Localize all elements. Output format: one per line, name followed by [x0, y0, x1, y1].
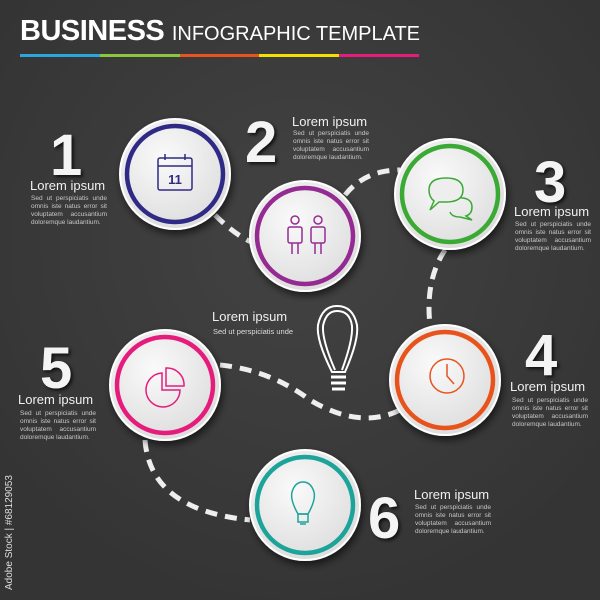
- step 6: Sed ut perspiciatis unde omnis iste natus error sit voluptatem accusantium doloremque laudantium.: [415, 504, 491, 535]
- icon: calendar: 11: [168, 172, 182, 187]
- circle 5: [110, 330, 220, 440]
- step 3: Lorem ipsum: [514, 204, 589, 219]
- step 3: [514, 150, 591, 252]
- icon: clock: [430, 359, 464, 393]
- step 3: Sed ut perspiciatis unde omnis iste natus error sit voluptatem accusantium doloremque laudantium.: [515, 221, 591, 252]
- icon: small bulb: [292, 482, 314, 524]
- step 4: Lorem ipsum: [510, 379, 585, 394]
- icon: pie chart: [146, 368, 184, 407]
- step 1: Sed ut perspiciatis unde omnis iste natus error sit voluptatem accusantium doloremque laudantium.: [31, 195, 107, 226]
- step 5: Lorem ipsum: [18, 392, 93, 407]
- step 6: Lorem ipsum: [414, 487, 489, 502]
- step 5: [18, 336, 96, 441]
- circle 1: [120, 119, 230, 229]
- step 1: 1: [50, 123, 82, 188]
- center text: [212, 309, 293, 336]
- circle 4: [390, 325, 500, 435]
- center text: Sed ut perspiciatis unde: [213, 327, 293, 336]
- step 4: 4: [525, 323, 557, 388]
- step 2: Sed ut perspiciatis unde omnis iste natus error sit voluptatem accusantium doloremque laudantium.: [293, 130, 369, 161]
- step 4: [510, 323, 588, 428]
- circle 2: [250, 181, 360, 291]
- step 3: 3: [534, 150, 566, 215]
- step 2: [245, 110, 369, 175]
- step 5: Sed ut perspiciatis unde omnis iste natus error sit voluptatem accusantium doloremque laudantium.: [20, 410, 96, 441]
- step 2: 2: [245, 110, 277, 175]
- icon: calendar: [158, 154, 192, 190]
- step 4: Sed ut perspiciatis unde omnis iste natus error sit voluptatem accusantium doloremque laudantium.: [512, 397, 588, 428]
- step 6: [368, 486, 491, 551]
- center text: Lorem ipsum: [212, 309, 287, 324]
- step 6: 6: [368, 486, 400, 551]
- icon: people: [288, 216, 325, 254]
- step 1: [30, 123, 107, 226]
- step 2: Lorem ipsum: [292, 114, 367, 129]
- watermark id: Adobe Stock | #68129053: [4, 475, 15, 590]
- circle 3: [395, 139, 505, 249]
- icon: chat: [429, 178, 472, 220]
- circle 6: [250, 450, 360, 560]
- connectors: [145, 170, 445, 520]
- step 1: Lorem ipsum: [30, 178, 105, 193]
- icon: central bulb: [318, 306, 357, 389]
- title: BUSINESS INFOGRAPHIC TEMPLATE: [20, 15, 420, 47]
- step 5: 5: [40, 336, 72, 401]
